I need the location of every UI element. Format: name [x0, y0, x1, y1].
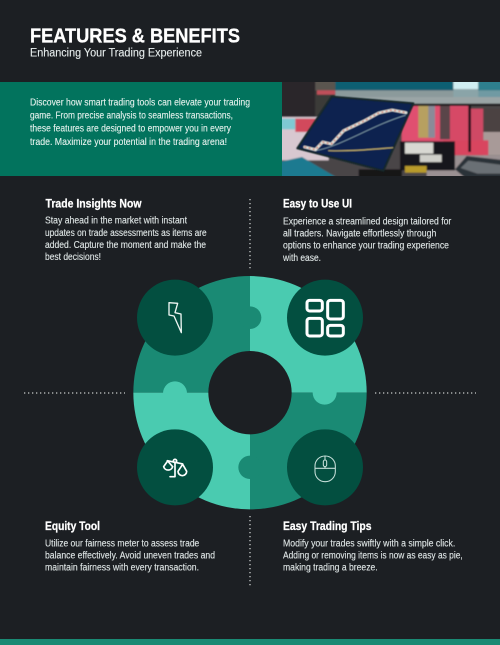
puzzle ring diagram	[133, 276, 367, 509]
title: FEATURES & BENEFITS	[30, 26, 240, 48]
text block: Equity Tool: Equity Tool	[45, 521, 100, 533]
ring: bottom-right piece	[250, 393, 367, 509]
text block: Trade Insights Now: Trade Insights Now	[46, 198, 142, 210]
text block: Trade Insights Now: updates on trade assessments as items are	[45, 228, 207, 239]
intro text: these features are designed to empower you in every	[30, 123, 232, 134]
text block: Trade Insights Now: Stay ahead in the market with instant	[45, 215, 187, 226]
panel: intro band	[0, 82, 282, 176]
photo: tablet showing trading chart	[282, 82, 500, 176]
footer bar	[0, 639, 500, 645]
text block: Easy to Use UI: options to enhance your trading experience	[283, 240, 449, 251]
text block: Easy to Use UI: with ease.	[282, 253, 321, 264]
text block: Easy to Use UI: all traders. Navigate effortlessly through	[283, 228, 436, 239]
text block: Easy Trading Tips: making trading a breeze.	[283, 563, 378, 574]
puzzle knob: top	[239, 306, 261, 329]
text block: Equity Tool: Utilize our fairness meter to assess trade	[45, 539, 200, 550]
text block: Easy Trading Tips	[283, 521, 463, 574]
text block: Equity Tool: balance effectively. Avoid uneven trades and	[45, 551, 215, 562]
text block: Easy Trading Tips: Easy Trading Tips	[283, 521, 372, 533]
ring: bottom-left piece	[133, 393, 250, 509]
text block: Trade Insights Now	[45, 198, 207, 263]
text block: Equity Tool: maintain fairness with every transaction.	[45, 563, 199, 574]
text block: Trade Insights Now: best decisions!	[45, 252, 101, 263]
subtitle: Enhancing Your Trading Experience	[30, 48, 202, 60]
text block: Easy to Use UI: Easy to Use UI	[283, 198, 352, 210]
intro text	[30, 98, 250, 148]
tablet body	[297, 97, 413, 171]
text block: Easy to Use UI: Experience a streamlined design tailored for	[283, 216, 452, 227]
icon: UI grid	[287, 280, 363, 356]
text block: Equity Tool	[45, 521, 215, 574]
intro text: game. From precise analysis to seamless transactions,	[30, 111, 233, 122]
intro text: trade. Maximize your potential in the trading arena!	[30, 137, 227, 148]
icon: lightning bolt	[137, 280, 213, 356]
puzzle knob: bottom	[238, 456, 262, 479]
intro text: Discover how smart trading tools can elevate your trading	[30, 98, 250, 109]
puzzle knob: right	[313, 381, 337, 405]
text block: Easy to Use UI	[282, 198, 452, 264]
text block: Easy Trading Tips: Modify your trades swiftly with a simple click.	[283, 539, 455, 550]
ring hole	[208, 351, 292, 434]
icon: computer mouse	[287, 429, 363, 505]
text block: Trade Insights Now: added. Capture the moment and make the	[45, 240, 206, 251]
ring: top-right piece	[250, 276, 367, 393]
text block: Easy Trading Tips: Adding or removing items is now as easy as pie,	[283, 551, 463, 562]
puzzle knob: left	[163, 381, 187, 405]
icon: balance scale	[137, 429, 213, 505]
ring: top-left piece	[133, 276, 250, 393]
